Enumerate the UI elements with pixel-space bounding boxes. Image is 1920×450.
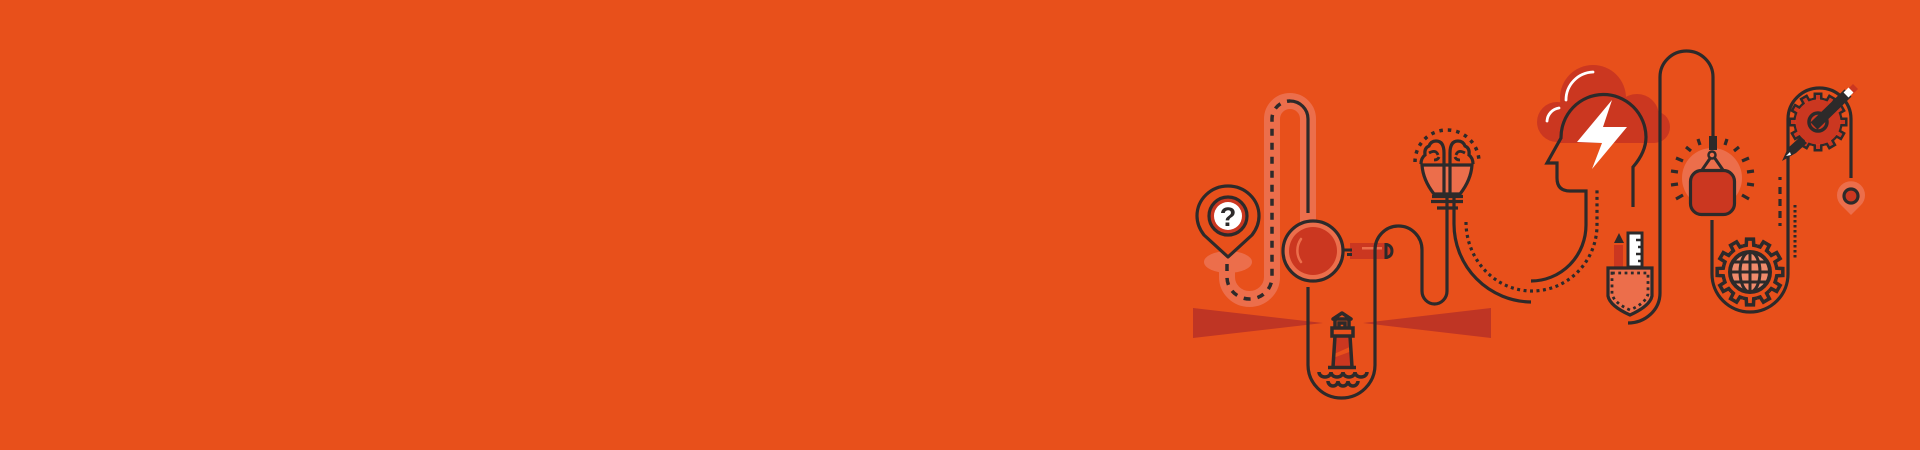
long loop xyxy=(1628,51,1713,323)
magnifier handle xyxy=(1344,243,1392,259)
pin shadow xyxy=(1204,251,1252,273)
solid road xyxy=(1290,101,1308,213)
cloud highlights xyxy=(1547,72,1593,121)
map pin with question mark: ? xyxy=(1220,202,1236,232)
crane weight xyxy=(1682,136,1742,214)
small location pin xyxy=(1837,181,1865,215)
cloud xyxy=(1537,65,1670,143)
dotted vertical xyxy=(1794,205,1796,258)
red gear with pen xyxy=(1782,84,1858,161)
head outline xyxy=(1531,94,1646,281)
dashed road xyxy=(1227,101,1290,299)
dashed vertical xyxy=(1778,177,1782,228)
ruler xyxy=(1628,233,1642,267)
magnifier lens xyxy=(1283,221,1343,281)
lighthouse xyxy=(1319,313,1367,386)
line through lighthouse loop xyxy=(1308,196,1447,398)
cable curve xyxy=(1454,198,1531,302)
pencil xyxy=(1614,233,1624,268)
road band xyxy=(1227,101,1308,299)
light beam left xyxy=(1193,308,1323,338)
weight rays xyxy=(1671,139,1754,199)
pocket xyxy=(1608,268,1652,315)
light bulb xyxy=(1421,141,1473,208)
globe loop xyxy=(1712,88,1851,312)
dotted curve xyxy=(1466,187,1597,291)
lightning bolt xyxy=(1577,100,1627,169)
globe gear xyxy=(1717,239,1783,305)
light beam right xyxy=(1363,308,1491,338)
bulb rays xyxy=(1415,130,1479,162)
map pin with question mark xyxy=(1197,186,1259,257)
